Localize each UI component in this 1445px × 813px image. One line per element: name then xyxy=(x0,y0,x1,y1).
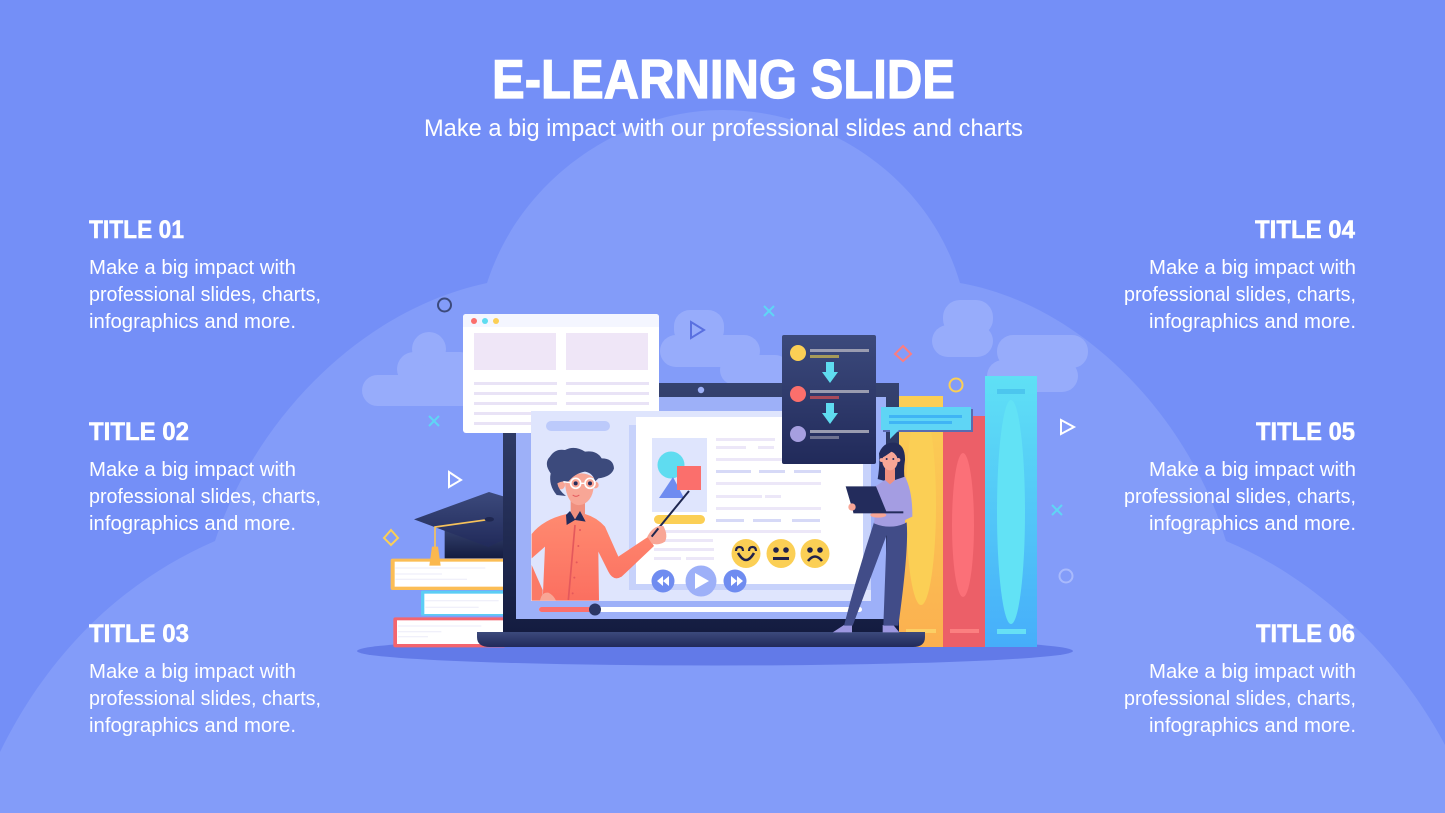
text block: title 06: infographics and more. xyxy=(1149,715,1356,737)
text block: title 04: Make a big impact with xyxy=(1149,257,1356,279)
slide text lines xyxy=(654,438,821,560)
standing books xyxy=(899,376,1037,647)
text block: title 05: Make a big impact with xyxy=(1149,459,1356,481)
text block: title 01: Make a big impact with xyxy=(89,257,296,279)
text block: title 02: professional slides, charts, xyxy=(89,486,321,508)
text block: title 03: TITLE 03 xyxy=(89,620,189,648)
text block: title 02: infographics and more. xyxy=(89,513,296,535)
flowchart panel xyxy=(782,335,876,464)
text block: title 05: infographics and more. xyxy=(1149,513,1356,535)
text block: title 05 xyxy=(1124,418,1356,535)
accent shapes xyxy=(384,298,1074,582)
slide shapes xyxy=(652,438,707,524)
text block: title 06: TITLE 06 xyxy=(1256,620,1355,648)
text block: title 01: TITLE 01 xyxy=(89,216,184,244)
floating web window xyxy=(463,314,659,433)
title: E-LEARNING SLIDE xyxy=(492,48,955,110)
progress bar xyxy=(539,604,862,616)
text block: title 02: TITLE 02 xyxy=(89,418,189,446)
text block: title 04: infographics and more. xyxy=(1149,311,1356,333)
text block: title 05: professional slides, charts, xyxy=(1124,486,1356,508)
text block: title 04: TITLE 04 xyxy=(1255,216,1355,244)
emoji reactions xyxy=(732,539,830,568)
graduation cap xyxy=(414,492,507,566)
text block: title 06: professional slides, charts, xyxy=(1124,688,1356,710)
text block: title 06 xyxy=(1124,620,1356,737)
text block: title 01: infographics and more. xyxy=(89,311,296,333)
text block: title 02 xyxy=(89,418,321,535)
text block: title 04 xyxy=(1124,216,1356,333)
text block: title 03: infographics and more. xyxy=(89,715,296,737)
teacher character xyxy=(532,448,689,601)
illustration: e-learning scene xyxy=(357,298,1088,666)
text block: title 04: professional slides, charts, xyxy=(1124,284,1356,306)
text block: title 05: TITLE 05 xyxy=(1256,418,1355,446)
laptop screen frame xyxy=(503,383,899,632)
speech bubble xyxy=(881,407,973,439)
left book stack xyxy=(391,559,506,647)
decorative clouds xyxy=(362,300,1088,406)
text block: title 02: Make a big impact with xyxy=(89,459,296,481)
woman character xyxy=(833,443,912,632)
media controls xyxy=(652,566,746,596)
laptop xyxy=(477,383,925,647)
subtitle: Make a big impact with our professional slides and charts xyxy=(424,115,1023,142)
text block: title 03: Make a big impact with xyxy=(89,661,296,683)
laptop base xyxy=(477,632,925,647)
video slide xyxy=(531,411,871,601)
text block: title 01: professional slides, charts, xyxy=(89,284,321,306)
text block: title 01 xyxy=(89,216,321,333)
text block: title 06: Make a big impact with xyxy=(1149,661,1356,683)
text block: title 03 xyxy=(89,620,321,737)
ground shadow xyxy=(357,636,1073,666)
text block: title 03: professional slides, charts, xyxy=(89,688,321,710)
